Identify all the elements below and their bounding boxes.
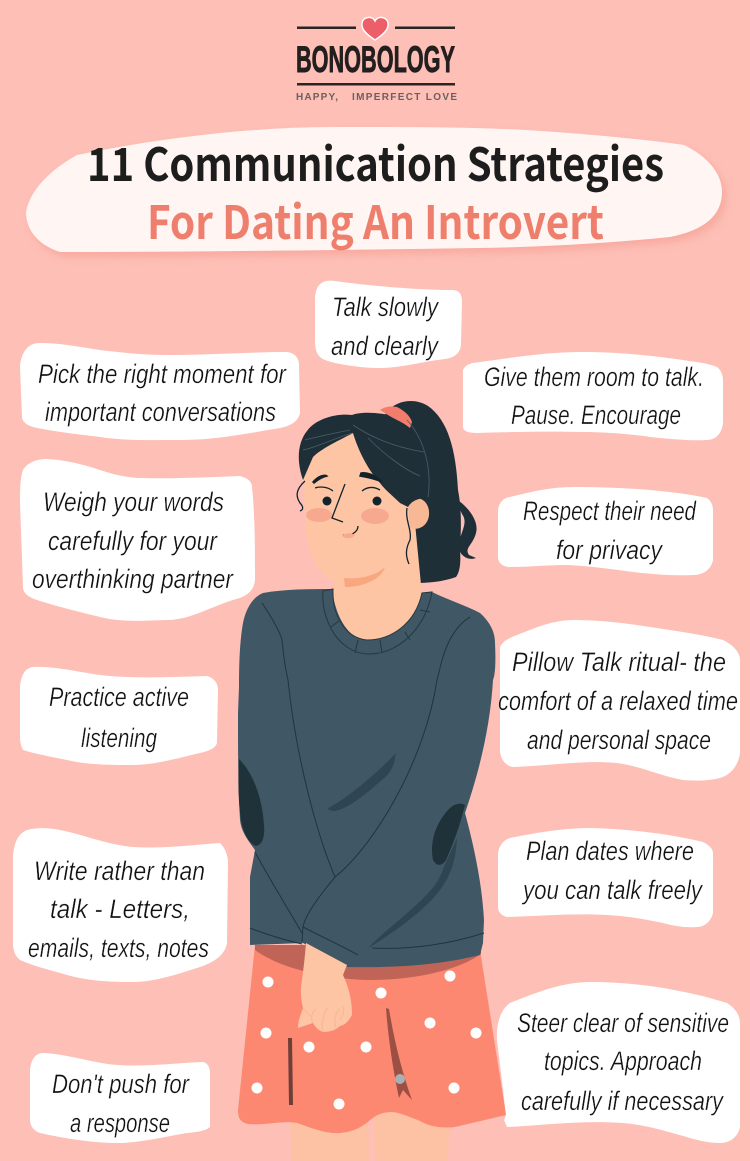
collar ribbing: [323, 589, 432, 654]
hair tie: [380, 406, 412, 428]
bubble: talk slowly: Talk slowly: [332, 292, 439, 322]
bubble: don't push: [30, 1053, 210, 1143]
sleeve shadow: [368, 838, 457, 948]
bubble: weigh your words: Weigh your words: [43, 487, 224, 517]
bubble: talk slowly: and clearly: [331, 331, 439, 361]
bubble: plan dates: you can talk freely: [521, 875, 703, 905]
skirt folds: [288, 1038, 293, 1105]
bubble: write rather than talk: emails, texts, notes: [28, 933, 209, 963]
bubble: respect their need: Respect their need: [523, 496, 697, 526]
title line 1: 11 Communication Strategies: [87, 129, 664, 195]
eyes and eyebrows: [313, 473, 382, 506]
bubble: pillow talk ritual: [498, 620, 740, 781]
bubble: practice active listening: [20, 667, 218, 765]
bubble: write rather than talk: Write rather than: [34, 856, 205, 886]
cheeks: [306, 508, 332, 522]
hair highlights: [303, 420, 429, 497]
illustration: introverted woman: [238, 401, 506, 1161]
skirt shadow: [255, 945, 481, 980]
torso crease: [328, 753, 396, 811]
icon: heart: [362, 17, 388, 40]
fingers: [303, 1006, 344, 1032]
title line 2: For Dating An Introvert: [147, 187, 604, 253]
eye lids, nose, mouth, curls: [297, 481, 410, 564]
bubble: practice active listening: Practice active: [49, 682, 189, 712]
logo: Bonobology: [296, 17, 457, 103]
bubble: practice active listening: listening: [81, 723, 157, 753]
bubble: plan dates: [498, 828, 713, 927]
ponytail and back hair: [385, 401, 461, 583]
face: [303, 434, 409, 586]
bubble: pick the right moment: [20, 343, 300, 440]
nose blush: [342, 533, 355, 538]
hair wisp: [455, 498, 477, 559]
bubble: give them room: Pause. Encourage: [511, 400, 681, 430]
bubble: steer clear: topics. Approach: [544, 1046, 702, 1076]
bubble: write rather than talk: [13, 828, 228, 982]
bubble: pick the right moment: Pick the right moment for: [38, 359, 287, 389]
chin shadow: [344, 567, 385, 587]
ear: [408, 498, 429, 529]
hand: [298, 943, 352, 1032]
logo: Bonobology: HAPPY,: [296, 92, 338, 103]
bubble: plan dates: Plan dates where: [526, 836, 694, 866]
front hair: [299, 413, 429, 507]
bubble: don't push: Don't push for: [52, 1069, 190, 1099]
neck: [334, 523, 422, 640]
bubble: weigh your words: overthinking partner: [32, 564, 234, 594]
bubble: respect their need: for privacy: [556, 535, 663, 565]
logo: Bonobology: BONOBOLOGY: [296, 39, 455, 80]
bubble: don't push: a response: [70, 1108, 170, 1138]
bubble: give them room: [463, 352, 723, 440]
logo: Bonobology: IMPERFECT LOVE: [352, 92, 457, 103]
bubble: steer clear: [497, 982, 740, 1143]
sweater seam lines: [250, 603, 484, 955]
sweater: [238, 589, 495, 967]
bubble: pick the right moment: important conversations: [45, 397, 276, 427]
right elbow patch: [432, 804, 465, 865]
skirt polka dots: [252, 970, 482, 1110]
bubble: weigh your words: [20, 459, 255, 621]
bubble: talk slowly: [315, 281, 462, 368]
bubble: weigh your words: carefully for your: [48, 526, 218, 556]
bubble: respect their need: [498, 487, 713, 575]
legs: [290, 1105, 450, 1161]
left elbow patch: [238, 759, 264, 846]
skirt: [238, 945, 506, 1133]
bubble: write rather than talk: talk - Letters,: [50, 894, 190, 924]
title banner: [26, 127, 726, 257]
